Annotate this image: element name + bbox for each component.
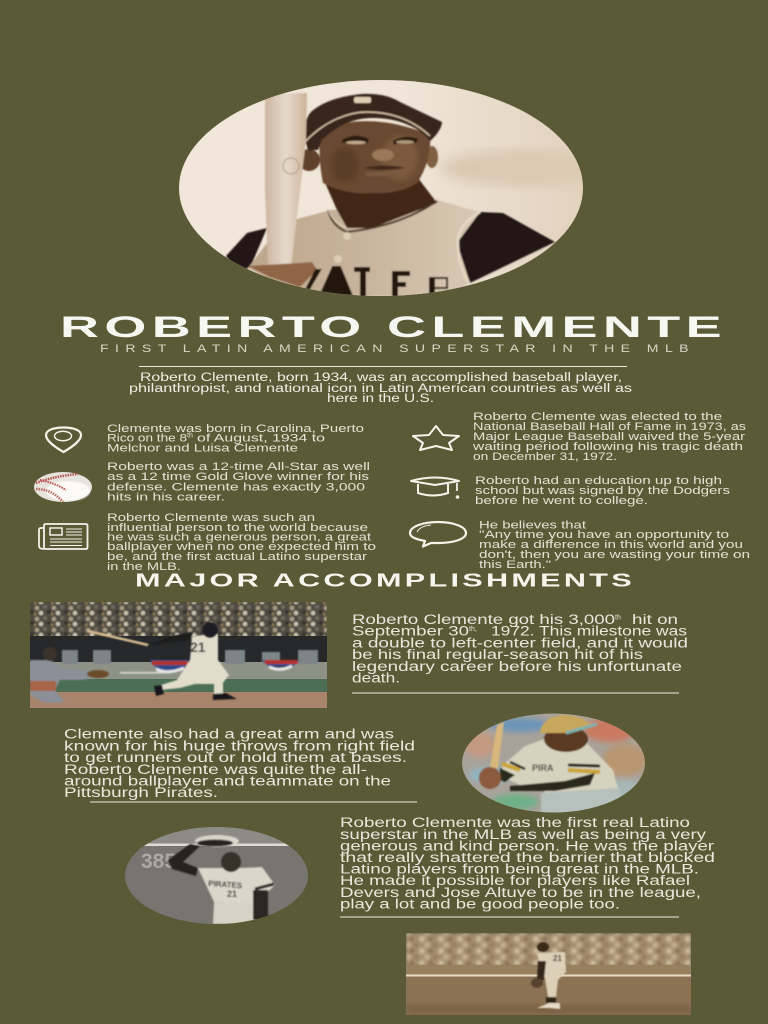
heading: major accomplishments: MAJOR ACCOMPLISHMENTS	[135, 570, 635, 590]
text: first Latino superstar: Roberto Clemente was the first real Latino	[340, 815, 690, 830]
intro text	[129, 372, 632, 405]
text: 3,000th hit: legendary career before his unfortunate	[352, 659, 682, 674]
text: 3,000th hit: September 30	[352, 624, 469, 638]
text: career honours: defense. Clemente has exactly 3,000	[107, 482, 365, 494]
text: education	[475, 475, 731, 507]
photo: Clemente tipping his cap: PIRATES	[208, 879, 243, 890]
icon: newspaper	[39, 524, 88, 549]
text: first Latino superstar: Latino players from being great in the MLB.	[340, 862, 699, 876]
text: education: before he went to college.	[475, 495, 648, 507]
text: influence: influential person to the world because	[107, 522, 368, 534]
icon: location pin	[46, 428, 81, 452]
text: influence: be, and the first actual Latino superstar	[107, 551, 367, 563]
text: quote	[479, 520, 750, 571]
photo: Clemente batting in colour: PIRA	[532, 763, 554, 773]
icon: star	[413, 426, 459, 450]
photo: Clemente tipping his cap: 21	[227, 889, 237, 899]
photo: Clemente in the field in sepia	[406, 933, 691, 1016]
photo: Clemente tipping his cap	[125, 827, 308, 924]
text: hall of fame: waiting period following his tragic death	[472, 441, 743, 453]
text: first Latino superstar: He made it possible for players like Rafael	[340, 873, 690, 888]
photo: Clemente tipping his cap: 385	[141, 850, 176, 873]
text: great arm: to get runners out or hold them at bases.	[64, 750, 407, 765]
text: career honours: as a 12 time Gold Glove winner for his	[107, 471, 370, 483]
photo: 3,000th hit swing: 21	[190, 639, 206, 655]
text: first Latino superstar: superstar in the MLB as well as being a very	[340, 827, 706, 842]
text: influence	[107, 512, 376, 573]
text: quote: this Earth."	[479, 559, 551, 571]
text: great arm: Pittsburgh Pirates.	[64, 785, 218, 800]
text: great arm: Clemente also had a great arm and was	[64, 726, 394, 742]
text: birthplace	[107, 423, 364, 454]
text: birthplace: of August, 1934 to	[197, 432, 325, 444]
text: quote: "Any time you have an opportunity to	[479, 529, 729, 541]
text: education: Roberto had an education up to high	[475, 475, 722, 487]
text: influence: ballplayer when no one expected him to	[107, 541, 376, 553]
text: first Latino superstar: play a lot and be good people too.	[340, 896, 620, 912]
text: influence: in the MLB.	[107, 561, 181, 573]
photo: 3,000th hit swing	[30, 602, 327, 708]
icon: baseball	[34, 472, 92, 502]
text: hall of fame	[472, 411, 747, 463]
text: great arm: Roberto Clemente was quite the all-	[64, 762, 367, 777]
text: great arm	[64, 726, 415, 800]
text: birthplace: Clemente was born in Carolina, Puerto	[107, 423, 364, 435]
text: first Latino superstar: Devers and Jose Altuve to be in the league,	[340, 885, 701, 900]
photo: Clemente portrait with bat	[179, 80, 600, 296]
text: 3,000th hit: be his final regular-season hit of his	[352, 647, 643, 662]
text: 3,000th hit: death.	[352, 670, 400, 686]
intro text: here in the U.S.	[327, 393, 434, 405]
text: birthplace: Melchor and Luisa Clemente	[107, 442, 298, 454]
text: education: school but was signed by the Dodgers	[475, 485, 731, 497]
text: birthplace: th	[187, 432, 193, 440]
text: 3,000th hit: th,	[469, 626, 477, 633]
text: quote: He believes that	[479, 520, 586, 532]
text: 3,000th hit: Roberto Clemente got his 3,000	[352, 612, 615, 627]
subtitle: FIRST LATIN AMERICAN SUPERSTAR IN THE MLB	[100, 343, 695, 355]
text: 3,000th hit	[352, 612, 688, 686]
intro text: philanthropist, and national icon in Latin American countries as well as	[129, 383, 632, 395]
intro text: Roberto Clemente, born 1934, was an accomplished baseball player,	[140, 372, 622, 384]
title: ROBERTO CLEMENTE	[60, 311, 727, 344]
text: birthplace: Rico on the 8	[107, 432, 187, 444]
text: career honours: Roberto was a 12-time All-Star as well	[107, 461, 370, 473]
icon: graduation cap	[411, 478, 459, 499]
text: 3,000th hit: hit on	[632, 612, 678, 627]
text: first Latino superstar	[340, 815, 715, 912]
photo: Clemente in the field in sepia: 21	[553, 954, 562, 963]
text: great arm: known for his huge throws from right field	[64, 738, 415, 754]
icon: speech bubble	[410, 522, 466, 546]
text: 3,000th hit: th	[615, 614, 621, 622]
text: great arm: around ballplayer and teammate on the	[64, 774, 391, 788]
text: hall of fame: National Baseball Hall of Fame in 1973, as	[473, 421, 747, 433]
text: 3,000th hit: a double to left-center field, and it would	[352, 636, 688, 650]
text: influence: Roberto Clemente was such an	[107, 512, 315, 524]
text: 3,000th hit: 1972. This milestone was	[491, 624, 687, 638]
text: first Latino superstar: generous and kind person. He was the player	[340, 838, 715, 854]
text: first Latino superstar: that really shattered the barrier that blocked	[340, 850, 715, 865]
text: hall of fame: Major League Baseball waived the 5-year	[473, 431, 745, 443]
text: career honours	[107, 461, 370, 504]
text: career honours: hits in his career.	[107, 492, 225, 504]
photo: Clemente batting in colour	[462, 713, 647, 813]
text: hall of fame: on December 31, 1972.	[473, 451, 617, 463]
text: hall of fame: Roberto Clemente was elected to the	[473, 411, 722, 423]
text: quote: don't, then you are wasting your time on	[479, 549, 750, 561]
text: influence: he was such a generous person, a great	[107, 532, 371, 544]
text: quote: make a difference in this world and you	[479, 539, 743, 551]
